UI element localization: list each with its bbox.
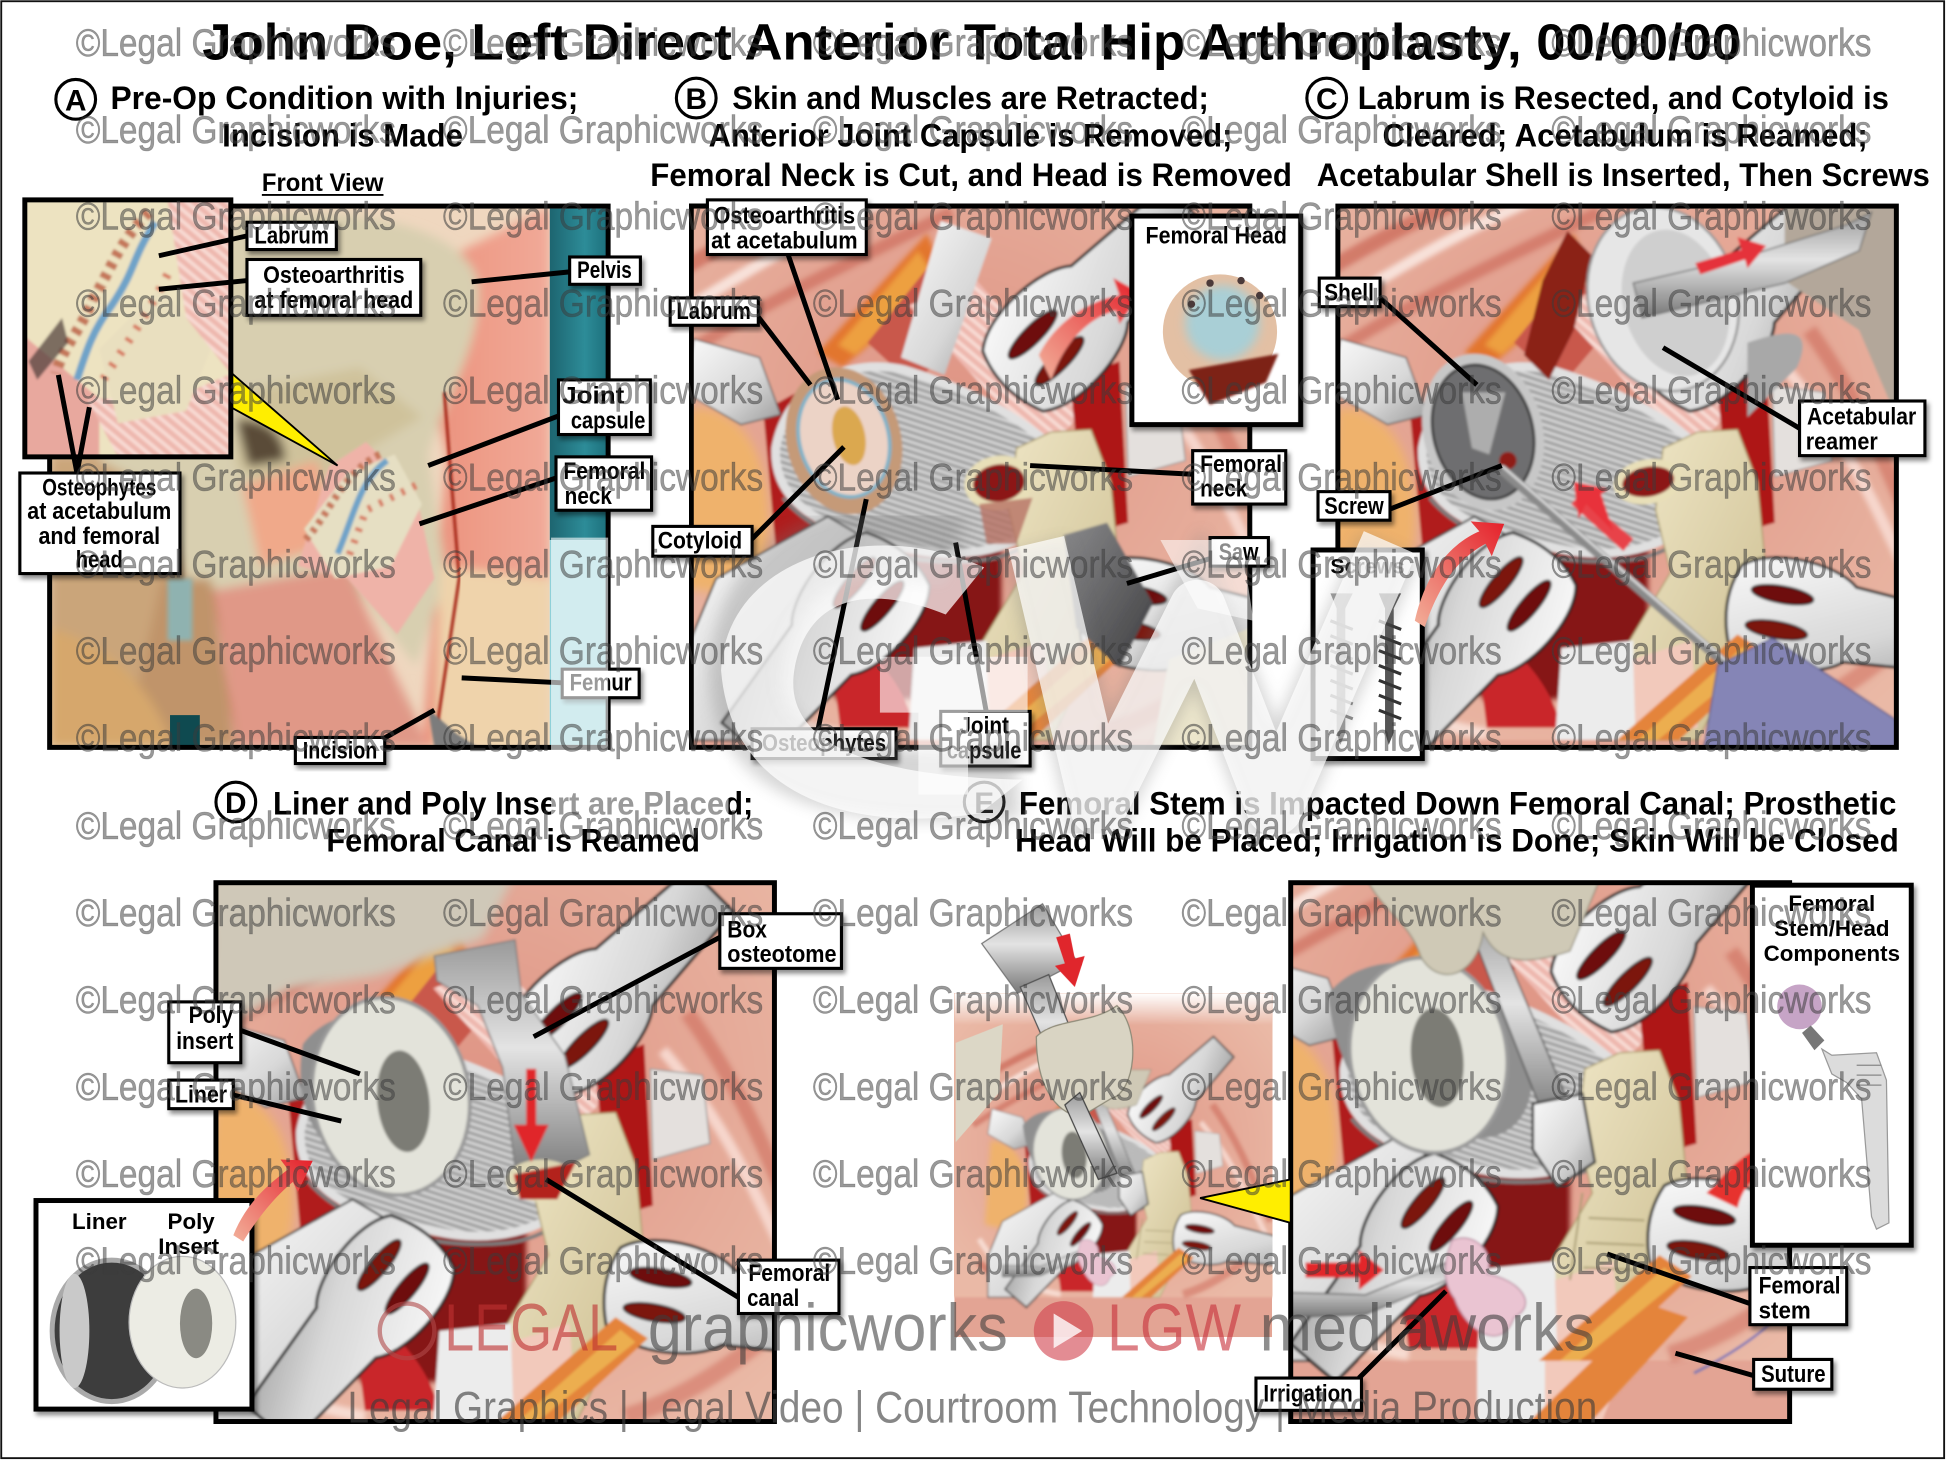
arrow: screws to shell — [1415, 521, 1504, 627]
watermark: repeated copyright grid: ©Legal Graphicworks — [443, 196, 763, 239]
heading B: B — [685, 83, 707, 116]
watermark: repeated copyright grid: ©Legal Graphicworks — [813, 543, 1133, 586]
watermark: repeated copyright grid: ©Legal Graphicworks — [1551, 22, 1872, 65]
watermark: repeated copyright grid: ©Legal Graphicworks — [813, 283, 1133, 326]
watermark: repeated copyright grid: ©Legal Graphicworks — [443, 1240, 763, 1283]
label: Osteoarthritis at femoral head: at femoral head — [254, 287, 413, 313]
watermark: repeated copyright grid: ©Legal Graphicworks — [76, 979, 396, 1022]
label: Femoral canal — [546, 1179, 839, 1314]
watermark: repeated copyright grid: ©Legal Graphicworks — [1551, 717, 1872, 760]
watermark: repeated copyright grid: ©Legal Graphicworks — [1551, 283, 1872, 326]
watermark: repeated copyright grid: ©Legal Graphicworks — [443, 1153, 763, 1196]
watermark: repeated copyright grid: ©Legal Graphicworks — [76, 196, 396, 239]
watermark: repeated copyright grid: ©Legal Graphicworks — [76, 543, 396, 586]
label: Incision: Incision — [303, 738, 377, 764]
watermark: repeated copyright grid: ©Legal Graphicworks — [813, 369, 1133, 412]
watermark: repeated copyright grid: ©Legal Graphicworks — [76, 456, 396, 499]
label: Poly insert: Poly — [189, 1002, 233, 1028]
watermark: repeated copyright grid: ©Legal Graphicworks — [1182, 109, 1502, 152]
label: Irrigation: Irrigation — [1263, 1381, 1353, 1407]
label: Joint capsule (A): capsule — [571, 407, 645, 433]
label: Osteoarthritis at acetabulum — [707, 200, 866, 400]
watermark: repeated copyright grid: ©Legal Graphicworks — [1551, 196, 1872, 239]
label: Shell — [1319, 278, 1477, 385]
inset: femoral stem and head components: Femoral — [1788, 891, 1875, 916]
watermark: repeated copyright grid: ©Legal Graphicworks — [1182, 1153, 1502, 1196]
label: Cotyloid: Cotyloid — [658, 528, 742, 554]
watermark: repeated copyright grid: ©Legal Graphicworks — [443, 630, 763, 673]
label: Acetabular reamer: reamer — [1806, 428, 1878, 454]
watermark: company logo line: mediaworks — [1260, 1291, 1595, 1366]
watermark: repeated copyright grid: ©Legal Graphicworks — [76, 283, 396, 326]
label: Osteophytes (B): Osteophytes — [762, 730, 886, 756]
watermark: repeated copyright grid: ©Legal Graphicworks — [443, 283, 763, 326]
inset: liner and poly insert — [36, 1201, 252, 1409]
watermark: repeated copyright grid: ©Legal Graphicworks — [1182, 805, 1502, 848]
watermark: repeated copyright grid: ©Legal Graphicworks — [443, 543, 763, 586]
panel B: retracted exposure with femoral neck cut — [689, 204, 1304, 750]
label: Saw: Saw — [1219, 539, 1259, 565]
label: Labrum (inset A) — [159, 222, 336, 256]
label: Poly insert: insert — [176, 1028, 233, 1054]
watermark: repeated copyright grid: ©Legal Graphicworks — [813, 979, 1133, 1022]
watermark: repeated copyright grid: ©Legal Graphicworks — [443, 805, 763, 848]
heading B: Anterior Joint Capsule is Removed; — [709, 117, 1232, 153]
watermark: repeated copyright grid: ©Legal Graphicworks — [1182, 196, 1502, 239]
watermark: repeated copyright grid: ©Legal Graphicworks — [76, 1153, 396, 1196]
label: Pelvis — [472, 257, 640, 284]
watermark: repeated copyright grid: ©Legal Graphicworks — [1182, 543, 1502, 586]
watermark: repeated copyright grid: ©Legal Graphicworks — [443, 892, 763, 935]
label: Femoral neck (B) — [1030, 451, 1286, 504]
label: Liner — [169, 1080, 341, 1121]
heading E — [964, 782, 1899, 859]
label: Pelvis: Pelvis — [577, 257, 632, 283]
watermark: repeated copyright grid: ©Legal Graphicworks — [443, 1066, 763, 1109]
label: Incision — [295, 710, 434, 764]
label: Osteoarthritis at acetabulum: Osteoarthritis — [714, 202, 855, 228]
label: Acetabular reamer — [1663, 348, 1925, 456]
inset: liner and poly insert: Insert — [158, 1234, 220, 1259]
label: Femoral stem — [1607, 1254, 1847, 1325]
label: Osteophytes at acetabulum and femoral head: and femoral — [38, 523, 160, 549]
watermark: repeated copyright grid: ©Legal Graphicworks — [813, 717, 1133, 760]
title: John Doe, Left Direct Anterior Total Hip Arthroplasty, 00/00/00 — [202, 14, 1741, 71]
heading A: A — [65, 84, 86, 117]
heading D: D — [225, 787, 247, 820]
watermark: repeated copyright grid: ©Legal Graphicworks — [443, 22, 763, 65]
heading A: Incision is Made — [222, 117, 463, 153]
label: Femoral neck (B): Femoral — [1200, 451, 1282, 477]
watermark: services tagline: Legal Graphics | Legal Video | Courtroom Technology | Media Production — [348, 1384, 1597, 1433]
inset: femoral head: Femoral Head — [1146, 222, 1287, 248]
watermark: repeated copyright grid: ©Legal Graphicworks — [813, 22, 1133, 65]
label: Labrum (B) — [670, 298, 810, 385]
watermark: large LGW logo — [551, 538, 1390, 819]
watermark: repeated copyright grid: ©Legal Graphicworks — [1182, 1066, 1502, 1109]
watermark: repeated copyright grid: ©Legal Graphicworks — [813, 892, 1133, 935]
heading B: Femoral Neck is Cut, and Head is Removed — [650, 157, 1292, 193]
watermark: repeated copyright grid: ©Legal Graphicworks — [813, 456, 1133, 499]
heading B: Skin and Muscles are Retracted; — [732, 80, 1209, 116]
watermark: repeated copyright grid: ©Legal Graphicworks — [813, 1153, 1133, 1196]
watermark: repeated copyright grid: ©Legal Graphicworks — [813, 630, 1133, 673]
watermark: repeated copyright grid: ©Legal Graphicworks — [76, 892, 396, 935]
watermark: repeated copyright grid: ©Legal Graphicworks — [1182, 456, 1502, 499]
label: Joint capsule (B): capsule — [947, 738, 1021, 764]
label: Screw — [1318, 466, 1502, 520]
watermark: repeated copyright grid — [76, 22, 1872, 1283]
inset: femoral stem and head components: Stem/Head — [1774, 916, 1890, 941]
watermark: repeated copyright grid: ©Legal Graphicworks — [76, 805, 396, 848]
watermark: repeated copyright grid: ©Legal Graphicworks — [813, 196, 1133, 239]
heading E: Head Will be Placed; Irrigation is Done; Skin Will be Closed — [1015, 823, 1899, 859]
label: Osteophytes (B) — [752, 499, 896, 759]
label: Femoral canal: canal — [747, 1285, 799, 1311]
heading D — [216, 782, 753, 859]
watermark: repeated copyright grid: ©Legal Graphicworks — [1551, 369, 1872, 412]
watermark: repeated copyright grid: ©Legal Graphicworks — [443, 979, 763, 1022]
label: Acetabular reamer: Acetabular — [1807, 404, 1916, 430]
label: Femoral stem: Femoral — [1759, 1273, 1841, 1299]
watermark: repeated copyright grid: ©Legal Graphicworks — [443, 369, 763, 412]
label: Joint capsule (B) — [941, 543, 1030, 766]
watermark: repeated copyright grid: ©Legal Graphicworks — [1182, 630, 1502, 673]
heading C: Cleared; Acetabulum is Reamed; — [1383, 117, 1868, 153]
inset: screws: Screws — [1330, 556, 1405, 579]
label: Osteophytes at acetabulum and femoral head: head — [76, 546, 123, 572]
watermark: repeated copyright grid: ©Legal Graphicworks — [1182, 369, 1502, 412]
pointer: yellow callout from inset to joint — [231, 372, 338, 466]
panel C: acetabular shell and screws — [1162, 204, 1899, 750]
label: Irrigation — [1256, 1291, 1446, 1410]
watermark: repeated copyright grid: ©Legal Graphicworks — [1182, 717, 1502, 760]
watermark: repeated copyright grid: ©Legal Graphicworks — [1182, 892, 1502, 935]
heading E: Femoral Stem is Impacted Down Femoral Canal; Prosthetic — [1019, 785, 1896, 821]
heading C: Acetabular Shell is Inserted, Then Screws — [1317, 157, 1930, 193]
label: Osteophytes at acetabulum and femoral head: Osteophytes — [42, 474, 156, 500]
label: Femur — [462, 669, 639, 698]
watermark: repeated copyright grid: ©Legal Graphicworks — [76, 109, 396, 152]
hammer and hand — [956, 904, 1133, 1179]
watermark: repeated copyright grid: ©Legal Graphicworks — [813, 805, 1133, 848]
watermark: repeated copyright grid: ©Legal Graphicworks — [1182, 283, 1502, 326]
label: Femur: Femur — [570, 669, 632, 695]
label: Box osteotome: Box — [727, 916, 767, 942]
heading A — [56, 79, 578, 153]
heading D: Liner and Poly Insert are Placed; — [273, 785, 753, 821]
watermark: company logo line: LEGAL — [444, 1291, 618, 1366]
arrow: liner inset to panel — [233, 1160, 313, 1241]
watermark: repeated copyright grid: ©Legal Graphicworks — [1551, 979, 1872, 1022]
label: Saw — [1127, 538, 1268, 584]
heading C: C — [1316, 83, 1337, 116]
subheading: front view: Front View — [262, 170, 384, 197]
label: Femoral neck (A) — [419, 457, 652, 524]
label: Labrum (inset A): Labrum — [254, 222, 329, 248]
inset: screws — [1313, 550, 1422, 759]
inset: liner and poly insert: Liner — [72, 1209, 127, 1234]
watermark: repeated copyright grid: ©Legal Graphicworks — [76, 1240, 396, 1283]
label: Cotyloid — [653, 447, 844, 556]
label: Joint capsule (A): Joint — [562, 382, 624, 408]
pointer: small view to large view — [1200, 1179, 1291, 1223]
inset: liner and poly insert: Poly — [168, 1209, 215, 1234]
heading E: E — [974, 787, 994, 820]
watermark: repeated copyright grid: ©Legal Graphicworks — [813, 1066, 1133, 1109]
watermark: repeated copyright grid: ©Legal Graphicworks — [1551, 805, 1872, 848]
watermark: repeated copyright grid: ©Legal Graphicworks — [1551, 892, 1872, 935]
label: Femoral canal: Femoral — [748, 1260, 830, 1286]
label: Poly insert — [169, 1002, 360, 1074]
watermark: repeated copyright grid: ©Legal Graphicworks — [1551, 1153, 1872, 1196]
watermark: company logo line: LGW — [1107, 1291, 1242, 1366]
panel E small: impaction overview — [950, 904, 1290, 1337]
heading C: Labrum is Resected, and Cotyloid is — [1358, 80, 1889, 116]
label: Osteophytes at acetabulum and femoral head — [20, 375, 180, 574]
label: Osteoarthritis at femoral head: Osteoarthritis — [263, 262, 405, 288]
inset: femoral head — [1132, 216, 1301, 425]
watermark: repeated copyright grid: ©Legal Graphicworks — [76, 22, 396, 65]
watermark: repeated copyright grid: ©Legal Graphicworks — [1551, 543, 1872, 586]
watermark: repeated copyright grid: ©Legal Graphicworks — [443, 717, 763, 760]
watermark: repeated copyright grid: ©Legal Graphicworks — [76, 717, 396, 760]
label: Box osteotome — [534, 914, 841, 1037]
panel E large: femoral stem impaction — [1173, 703, 1897, 1424]
label: Femoral neck (A): Femoral — [563, 458, 645, 484]
watermark: repeated copyright grid: ©Legal Graphicworks — [76, 630, 396, 673]
watermark: repeated copyright grid: ©Legal Graphicworks — [813, 1240, 1133, 1283]
watermark: repeated copyright grid: ©Legal Graphicworks — [1551, 109, 1872, 152]
inset: femoral stem and head components — [1752, 885, 1911, 1245]
watermark: repeated copyright grid: ©Legal Graphicworks — [1182, 979, 1502, 1022]
inset: joint close-up — [25, 200, 231, 457]
watermark: repeated copyright grid: ©Legal Graphicworks — [1551, 1240, 1872, 1283]
label: Femoral neck (A): neck — [565, 483, 613, 509]
inset: femoral stem and head components: Components — [1764, 941, 1900, 966]
heading D: Femoral Canal is Reamed — [326, 823, 700, 859]
watermark: repeated copyright grid: ©Legal Graphicworks — [76, 369, 396, 412]
watermark: repeated copyright grid: ©Legal Graphicworks — [443, 456, 763, 499]
label: Screw: Screw — [1324, 493, 1384, 519]
label: Suture — [1675, 1353, 1832, 1389]
label: Osteoarthritis at acetabulum: at acetabulum — [711, 227, 858, 253]
label: Labrum (B): Labrum — [676, 298, 751, 324]
watermark: repeated copyright grid: ©Legal Graphicworks — [443, 109, 763, 152]
label: Femoral neck (B): neck — [1200, 476, 1248, 502]
watermark: company logo line: graphicworks — [648, 1291, 1008, 1366]
panel A: pelvis front view — [50, 206, 608, 747]
label: Osteoarthritis at femoral head — [159, 259, 421, 315]
panel D: liner and poly insert, canal reaming — [55, 880, 777, 1424]
heading C — [1307, 78, 1930, 193]
label: Joint capsule (B): Joint — [959, 713, 1009, 739]
teal band — [550, 209, 608, 540]
watermark: repeated copyright grid: ©Legal Graphicworks — [76, 1066, 396, 1109]
watermark: company logo line — [380, 1291, 1595, 1366]
heading A: Pre-Op Condition with Injuries; — [110, 80, 578, 116]
label: Suture: Suture — [1761, 1361, 1826, 1387]
label: Joint capsule (A) — [428, 380, 650, 466]
watermark: repeated copyright grid: ©Legal Graphicworks — [1182, 22, 1502, 65]
label: Liner: Liner — [175, 1081, 227, 1107]
watermark: repeated copyright grid: ©Legal Graphicworks — [1551, 630, 1872, 673]
label: Femoral stem: stem — [1759, 1297, 1811, 1323]
label: Osteophytes at acetabulum and femoral head: at acetabulum — [27, 498, 171, 524]
watermark: repeated copyright grid: ©Legal Graphicworks — [1551, 456, 1872, 499]
watermark: repeated copyright grid: ©Legal Graphicworks — [1182, 1240, 1502, 1283]
heading B — [650, 78, 1292, 193]
watermark: repeated copyright grid: ©Legal Graphicworks — [1551, 1066, 1872, 1109]
label: Shell: Shell — [1324, 279, 1374, 305]
watermark: repeated copyright grid: ©Legal Graphicworks — [813, 109, 1133, 152]
label: Box osteotome: osteotome — [727, 941, 836, 967]
